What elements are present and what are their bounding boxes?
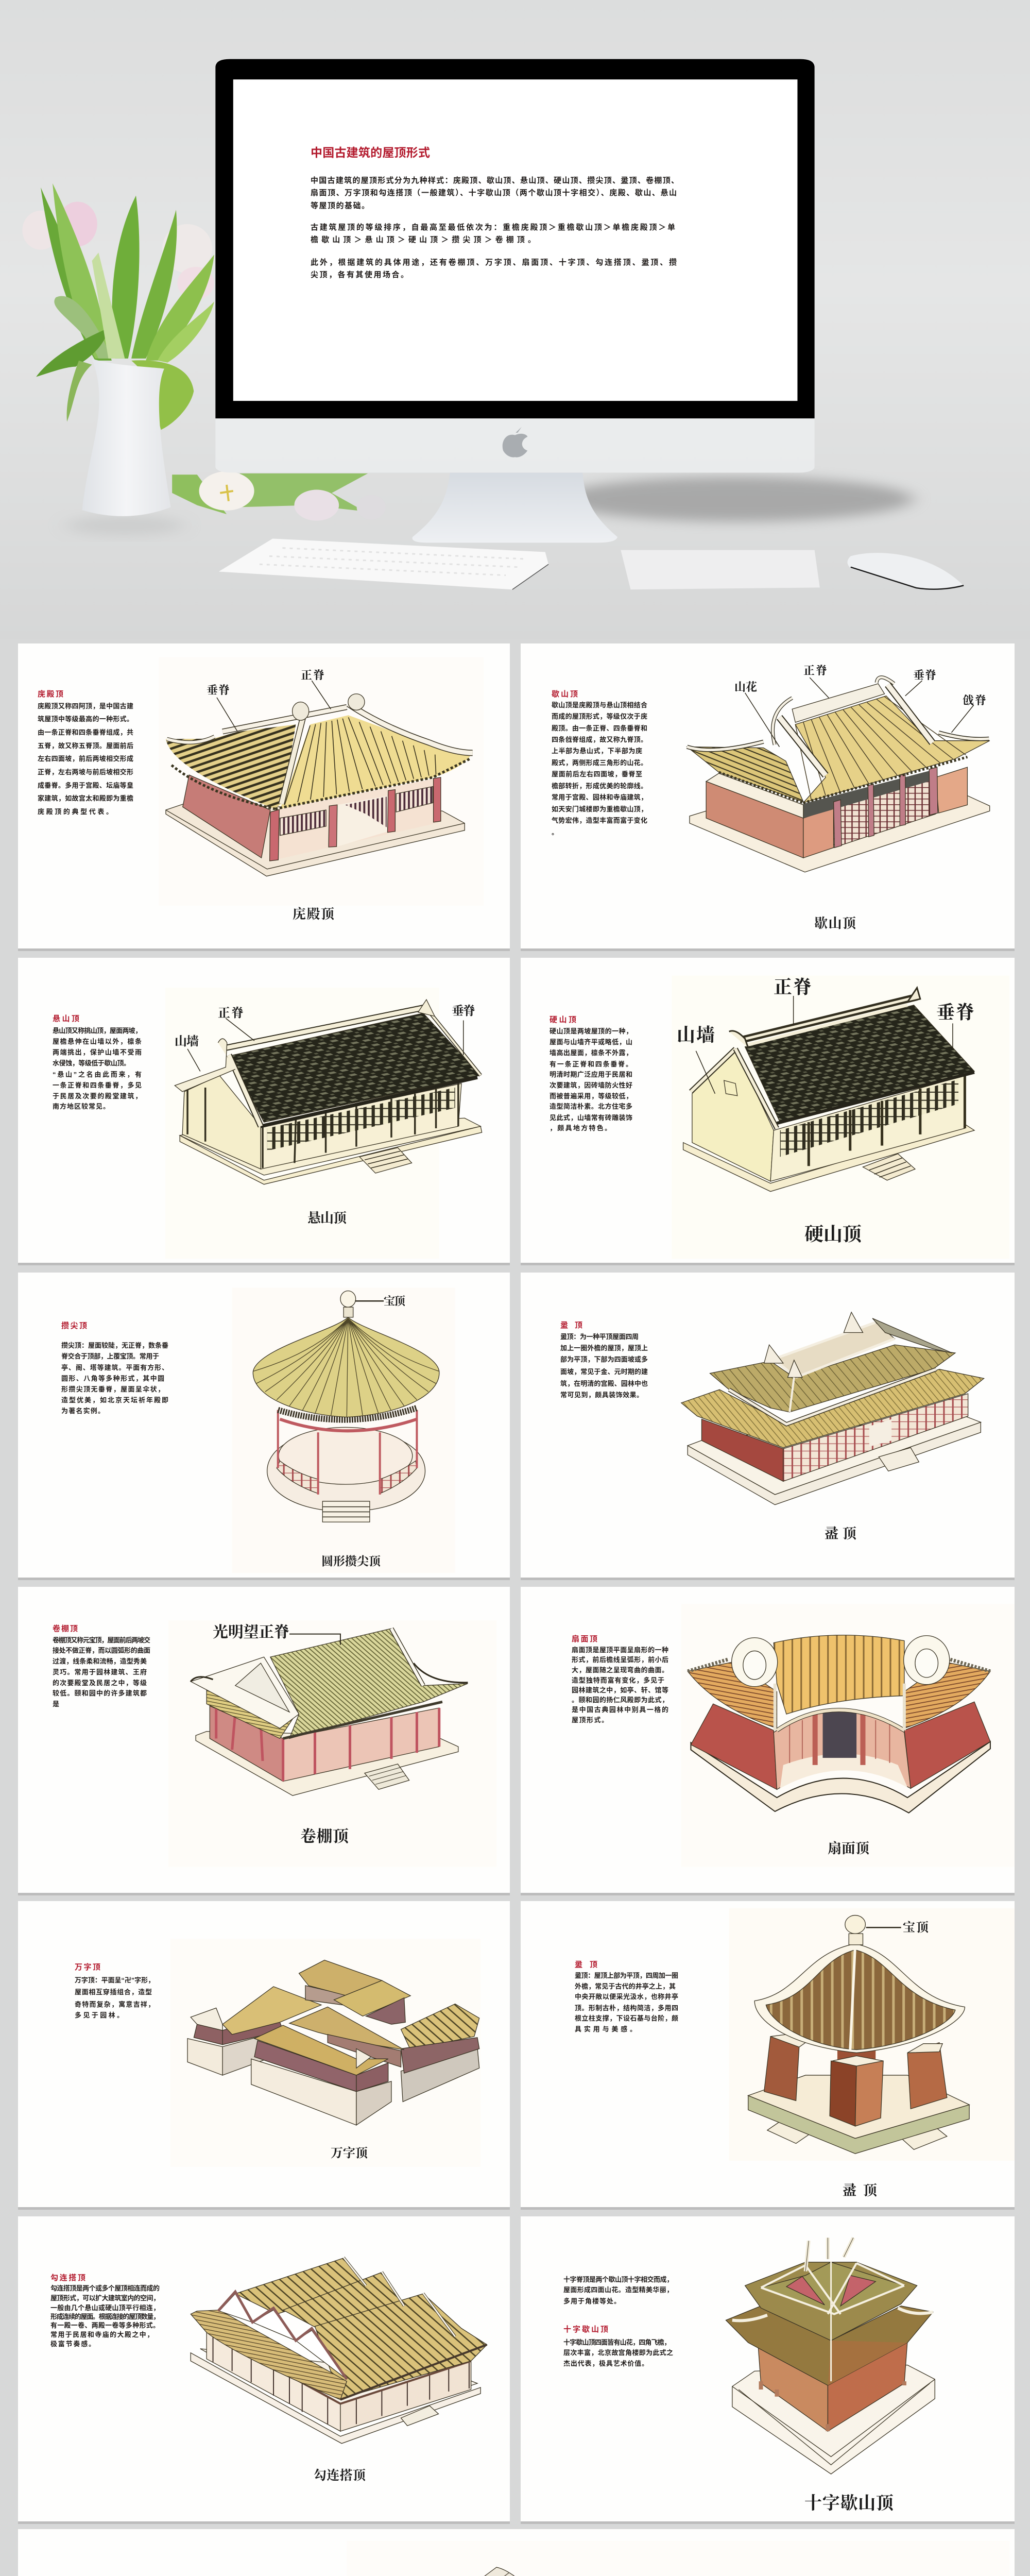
- text block: 如天安门城楼即为重檐歇山顶，: [552, 805, 647, 813]
- text block: 常可见到，颇具装饰效果。: [560, 1391, 643, 1399]
- text block: [53, 1027, 142, 1110]
- text block: 是: [53, 1700, 59, 1708]
- caption: 扇面顶: [828, 1841, 870, 1856]
- text block: 常用于民居和寺庙的大殿之中，: [50, 2331, 153, 2338]
- label: 山墙: 山墙: [175, 1035, 199, 1048]
- heading: 盝 顶: [560, 1321, 582, 1330]
- illustration: fan-shaped roof hall: [681, 1604, 1015, 1867]
- illustration: rolled-ridge roof hall: [168, 1620, 496, 1867]
- caption: 十字歇山顶: [804, 2494, 895, 2513]
- text block: 较低。颐和园中的许多建筑都: [53, 1689, 147, 1697]
- text block: 勾连搭顶是两个或多个屋顶相连而成的: [50, 2284, 160, 2292]
- text block: 檐部转折，形成优美的轮廓线。: [552, 782, 647, 790]
- text block: 墙高出屋面，檩条不外露，: [550, 1049, 632, 1057]
- text block: 一条正脊和四条垂脊，多见: [53, 1081, 142, 1089]
- illustration: flat-topped roof hall: [681, 1312, 984, 1505]
- scene: desktop computer mockup: [0, 0, 1030, 639]
- heading: 勾连搭顶: [50, 2273, 85, 2282]
- panel: 圆形攒尖顶: [18, 1273, 510, 1580]
- text block: 屋面与山墙齐平或略低，山: [550, 1038, 632, 1046]
- panel: 歇山顶: [521, 643, 1015, 951]
- text block: 见此式，山墙常有砖雕装饰: [550, 1114, 632, 1122]
- text block: 屋面前后左右四面坡，垂脊至: [552, 770, 642, 778]
- text block: [61, 1342, 168, 1415]
- text block: 上半部为悬山式，下半部为庑: [552, 747, 642, 755]
- text block: 悬山顶又称挑山顶，屋面两坡，: [53, 1027, 142, 1035]
- text block: 加上一圈外檐的屋顶，屋顶上: [560, 1344, 648, 1352]
- caption: 悬山顶: [307, 1211, 348, 1226]
- text block: 面坡，常见于金、元时期的建: [560, 1368, 648, 1376]
- text block: 正脊，左右两坡与前后坡相交形: [38, 768, 133, 776]
- text block: 殿式，两侧形成三角形的山花。: [552, 759, 647, 767]
- caption: 庑殿顶: [293, 907, 335, 922]
- caption: 万字顶: [331, 2146, 368, 2160]
- text block: 大，屋面随之呈现弯曲的曲面。: [572, 1666, 668, 1674]
- text block: 于民居及次要的殿堂建筑，: [53, 1092, 142, 1100]
- screen body text: 等屋顶的基础。: [311, 201, 369, 210]
- text block: 外檐，常见于古代的井亭之上，其: [575, 1982, 676, 1990]
- screen body text: 扇面顶、万字顶和勾连搭顶（一般建筑）、十字歇山顶（两个歇山顶十字相交）、庑殿、歇山、悬山: [311, 188, 677, 197]
- caption: 硬山顶: [804, 1224, 863, 1245]
- icon: tulips and leaves: [22, 183, 214, 430]
- text block: [38, 702, 133, 816]
- label: 戗脊: 戗脊: [963, 694, 986, 707]
- text block: 根立柱支撑，下设石基与台阶，颇: [575, 2014, 678, 2022]
- text block: 万字顶：平面呈“卍”字形，: [75, 1976, 154, 1984]
- heading: 万字顶: [75, 1962, 100, 1972]
- label: 山墙: 山墙: [677, 1025, 715, 1045]
- illustration: hip roof hall: [159, 657, 484, 906]
- heading: 扇面顶: [572, 1634, 597, 1643]
- text block: 接处不做正脊，而以圆弧形的曲面: [53, 1647, 150, 1654]
- text block: 圆形、八角等多种形式，其中圆: [61, 1375, 164, 1382]
- heading: 庑殿顶: [38, 689, 63, 699]
- label: 山花: 山花: [734, 681, 757, 693]
- text block: 歇山顶是庑殿顶与悬山顶相结合: [552, 701, 647, 709]
- label: 垂脊: 垂脊: [936, 1002, 974, 1023]
- caption: 盝 顶: [825, 1526, 857, 1541]
- text block: 屋檐悬伸在山墙以外，檩条: [53, 1038, 142, 1045]
- screen body text: [311, 176, 679, 279]
- text block: 气势宏伟，造型丰富而富于变化: [552, 817, 647, 824]
- text block: 形攒尖顶无垂脊，屋面呈伞状，: [61, 1385, 164, 1393]
- text block: 屋顶形式。: [572, 1716, 608, 1724]
- text block: 形成连续的屋面。根据连接的屋顶数量，: [50, 2313, 160, 2320]
- text block: 屋顶形式，可以扩大建筑室内的空间，: [50, 2294, 160, 2302]
- text block: 扇面顶是屋顶平面呈扇形的一种: [572, 1646, 668, 1654]
- panel: 扇面顶: [521, 1587, 1015, 1895]
- text block: 造型独特而富有变化，多见于: [572, 1676, 664, 1684]
- text block: 造型优美，如北京天坛祈年殿即: [61, 1396, 168, 1404]
- text block: 奇特而复杂，寓意吉祥，: [75, 2001, 154, 2008]
- text block: 的次要殿堂及民居之中，等级: [53, 1679, 147, 1687]
- text block: 水侵蚀，等级低于歇山顶。: [53, 1059, 130, 1067]
- text block: 多见于园林。: [75, 2011, 124, 2019]
- text block: [575, 1972, 678, 2033]
- panel: 硬山顶: [521, 958, 1015, 1265]
- label: 垂脊: 垂脊: [913, 669, 936, 682]
- label: 垂脊: 垂脊: [452, 1004, 475, 1018]
- text block: 成垂脊。多用于宫殿、坛庙等皇: [38, 782, 133, 789]
- icon: apple logo: [503, 427, 527, 457]
- text block: 过渡，线条柔和流畅，造型秀美: [53, 1657, 147, 1665]
- text block: 亭、阁、塔等建筑。平面有方形、: [61, 1364, 168, 1371]
- text block: 四条戗脊组成，故又称九脊顶。: [552, 736, 647, 743]
- illustration: flush gable roof: [672, 975, 1009, 1259]
- text block: 硬山顶是两坡屋顶的一种，: [550, 1027, 632, 1035]
- text block: 造型简洁朴素。北方住宅多: [550, 1103, 632, 1110]
- heading: 歇山顶: [552, 690, 578, 699]
- text block: 筑屋顶中等级最高的一种形式。: [38, 715, 133, 723]
- text block: [50, 2284, 160, 2348]
- keyboard: [219, 538, 548, 589]
- panel: 十字歇山顶: [521, 2216, 1015, 2524]
- panel: 盝顶 with pillars: [521, 1901, 1015, 2210]
- panel: 盝顶: [521, 1273, 1015, 1580]
- label: 正脊: 正脊: [218, 1006, 244, 1020]
- text block: description: 层次丰富，北京故宫角楼即为此式之: [563, 2349, 673, 2357]
- screen body text: 尖顶，各有其使用场合。: [311, 270, 408, 279]
- text block: description: 十字歇山顶四面皆有山花，四角飞檐，: [563, 2338, 671, 2346]
- text block: 屋面相互穿插组合，造型: [75, 1988, 152, 1996]
- label: 垂脊: 垂脊: [207, 684, 230, 697]
- label: 正脊: 正脊: [774, 977, 812, 997]
- text block: 形式，前后檐线呈弧形，前小后: [572, 1656, 668, 1664]
- illustration: rolled overhanging gable hall: [347, 2541, 1009, 2576]
- text block: 次要建筑，因砖墙防火性好: [550, 1081, 632, 1089]
- illustration: round pavilion: [232, 1288, 455, 1573]
- caption: 卷棚顶: [300, 1827, 350, 1845]
- text block: 。颐和园的扬仁风殿即为此式，: [572, 1696, 668, 1704]
- text block: 左右四面坡，前后两坡相交形成: [38, 755, 133, 762]
- text block: intro: 十字脊顶是两个歇山顶十字相交而成，: [563, 2276, 673, 2283]
- label: 宝顶: 宝顶: [903, 1921, 929, 1935]
- text block: 有一殿一卷、两殿一卷等多种形式。: [50, 2321, 160, 2329]
- text block: 极富节奏感。: [50, 2340, 95, 2348]
- label: 宝顶: 宝顶: [384, 1295, 406, 1308]
- heading: 攒尖顶: [61, 1321, 87, 1330]
- caption: 勾连搭顶: [314, 2468, 367, 2483]
- heading: 硬山顶: [550, 1015, 576, 1024]
- text block: ，颇具地方特色。: [550, 1124, 611, 1132]
- text block: 庑殿顶的典型代表。: [38, 808, 113, 816]
- text block: 南方地区较常见。: [53, 1103, 110, 1110]
- text block: 脊交合于顶部，上覆宝顶。常用于: [61, 1352, 159, 1360]
- caption: 圆形攒尖顶: [321, 1555, 381, 1568]
- text block: 筑，在明清的宫殿、园林中也: [560, 1380, 648, 1387]
- monitor body: [215, 59, 815, 472]
- text block: 为著名实例。: [61, 1407, 105, 1415]
- illustration: overhanging gable roof: [165, 988, 482, 1259]
- screen body text: 中国古建筑的屋顶形式分为九种样式：庑殿顶、歇山顶、悬山顶、硬山顶、攒尖顶、盝顶、卷棚顶、: [311, 176, 679, 185]
- panel: 万字顶: [18, 1901, 510, 2210]
- text block: 具实用与美感。: [575, 2025, 637, 2033]
- illustration: connected ridge roofs: [191, 2258, 487, 2444]
- text block: [75, 1976, 154, 2019]
- text block: 有一条正脊和四条垂脊。: [550, 1060, 632, 1068]
- text block: [552, 701, 647, 836]
- text block: 。: [552, 828, 558, 836]
- text block: 五脊，故又称五脊顶。屋面前后: [38, 742, 133, 750]
- illustration: cross-gable pavilion: [726, 2238, 935, 2474]
- illustration: swastika-plan roof: [170, 1939, 480, 2167]
- illustration: gable-and-hip roof hall: [687, 677, 990, 872]
- illustration: pillared pavilion: [729, 1908, 1015, 2161]
- panel: 勾连搭顶: [18, 2216, 510, 2524]
- heading: 十字歇山顶: [563, 2325, 608, 2334]
- label: 光明脊正脊: 光明望正脊: [213, 1624, 289, 1641]
- panel: 庑殿顶: [18, 643, 510, 951]
- heading: 悬山顶: [53, 1014, 79, 1023]
- panel: 卷棚悬山顶: [18, 2529, 1015, 2576]
- text block: intro: 多用于角楼等处。: [563, 2297, 621, 2305]
- monitor stand: [413, 472, 617, 543]
- text block: 庑殿顶又称四阿顶，是中国古建: [38, 702, 133, 710]
- text block: 而成的屋顶形式，等级仅次于庑: [552, 713, 647, 720]
- text block: 中央开敞以便采光汲水，也称井亭: [575, 1993, 678, 2001]
- text block: 部为平顶，下部为四面坡或多: [560, 1355, 648, 1363]
- text block: 明清时期广泛应用于民居和: [550, 1071, 632, 1078]
- text block: description: 杰出代表，极具艺术价值。: [563, 2360, 648, 2367]
- icon: flowers at desk: [172, 471, 386, 521]
- screen body text: 古建筑屋顶的等级排序，自最高至最低依次为：重檐庑殿顶＞重檐歇山顶＞单檐庑殿顶＞单: [311, 223, 675, 232]
- label: 正脊: 正脊: [803, 664, 827, 677]
- text block: 顶。形制古朴，结构简洁，多用四: [575, 2004, 678, 2012]
- heading: 卷棚顶: [53, 1624, 78, 1633]
- trackpad: [621, 550, 820, 589]
- text block: 盝顶：屋顶上部为平顶，四周加一圈: [575, 1972, 678, 1979]
- text block: 攒尖顶：屋面较陡，无正脊，数条垂: [61, 1342, 168, 1349]
- screen body text: 檐歇山顶＞悬山顶＞硬山顶＞攒尖顶＞卷棚顶。: [311, 235, 536, 244]
- text block: [53, 1636, 150, 1708]
- text block: intro: [563, 2276, 673, 2305]
- screen title: 中国古建筑的屋顶形式: [311, 146, 430, 159]
- text block: 而被普遍采用，等级较低，: [550, 1092, 632, 1100]
- text block: 两端挑出，保护山墙不受雨: [53, 1048, 142, 1056]
- text block: “悬山”之名由此而来，有: [53, 1071, 142, 1078]
- icon: white vase: [82, 359, 171, 516]
- mouse: [847, 553, 964, 590]
- caption: 盝 顶: [843, 2182, 878, 2198]
- panel: 悬山顶: [18, 958, 510, 1265]
- text block: [572, 1646, 668, 1724]
- text block: 园林建筑之中，如亭、轩、馆等: [572, 1686, 668, 1694]
- text block: 灵巧。常用于园林建筑、王府: [53, 1668, 147, 1676]
- text block: [560, 1333, 648, 1399]
- text block: description: [563, 2338, 673, 2367]
- panel: 卷棚顶: [18, 1587, 510, 1895]
- text block: 卷棚顶又称元宝顶，屋面前后两坡交: [53, 1636, 150, 1644]
- text block: 常用于宫殿、园林和寺庙建筑，: [552, 793, 647, 801]
- text block: 一般由几个悬山或硬山顶平行相连，: [50, 2304, 160, 2312]
- text block: 盝顶：为一种平顶屋面四周: [560, 1333, 639, 1341]
- heading: 盝 顶: [575, 1960, 597, 1969]
- screen body text: 此外，根据建筑的具体用途，还有卷棚顶、万字顶、扇面顶、十字顶、勾连搭顶、盝顶、攒: [311, 258, 677, 267]
- text block: 家建筑，如故宫太和殿即为重檐: [38, 794, 133, 802]
- label: 正脊: 正脊: [301, 669, 324, 682]
- text block: intro: 屋面形成四面山花。造型精美华丽，: [563, 2286, 673, 2294]
- text block: 殿顶。由一条正脊、四条垂脊和: [552, 724, 647, 732]
- text block: [550, 1027, 632, 1132]
- text block: 是中国古典园林中别具一格的: [572, 1706, 668, 1714]
- caption: 歇山顶: [814, 916, 857, 931]
- text block: 由一条正脊和四条垂脊组成，共: [38, 728, 133, 736]
